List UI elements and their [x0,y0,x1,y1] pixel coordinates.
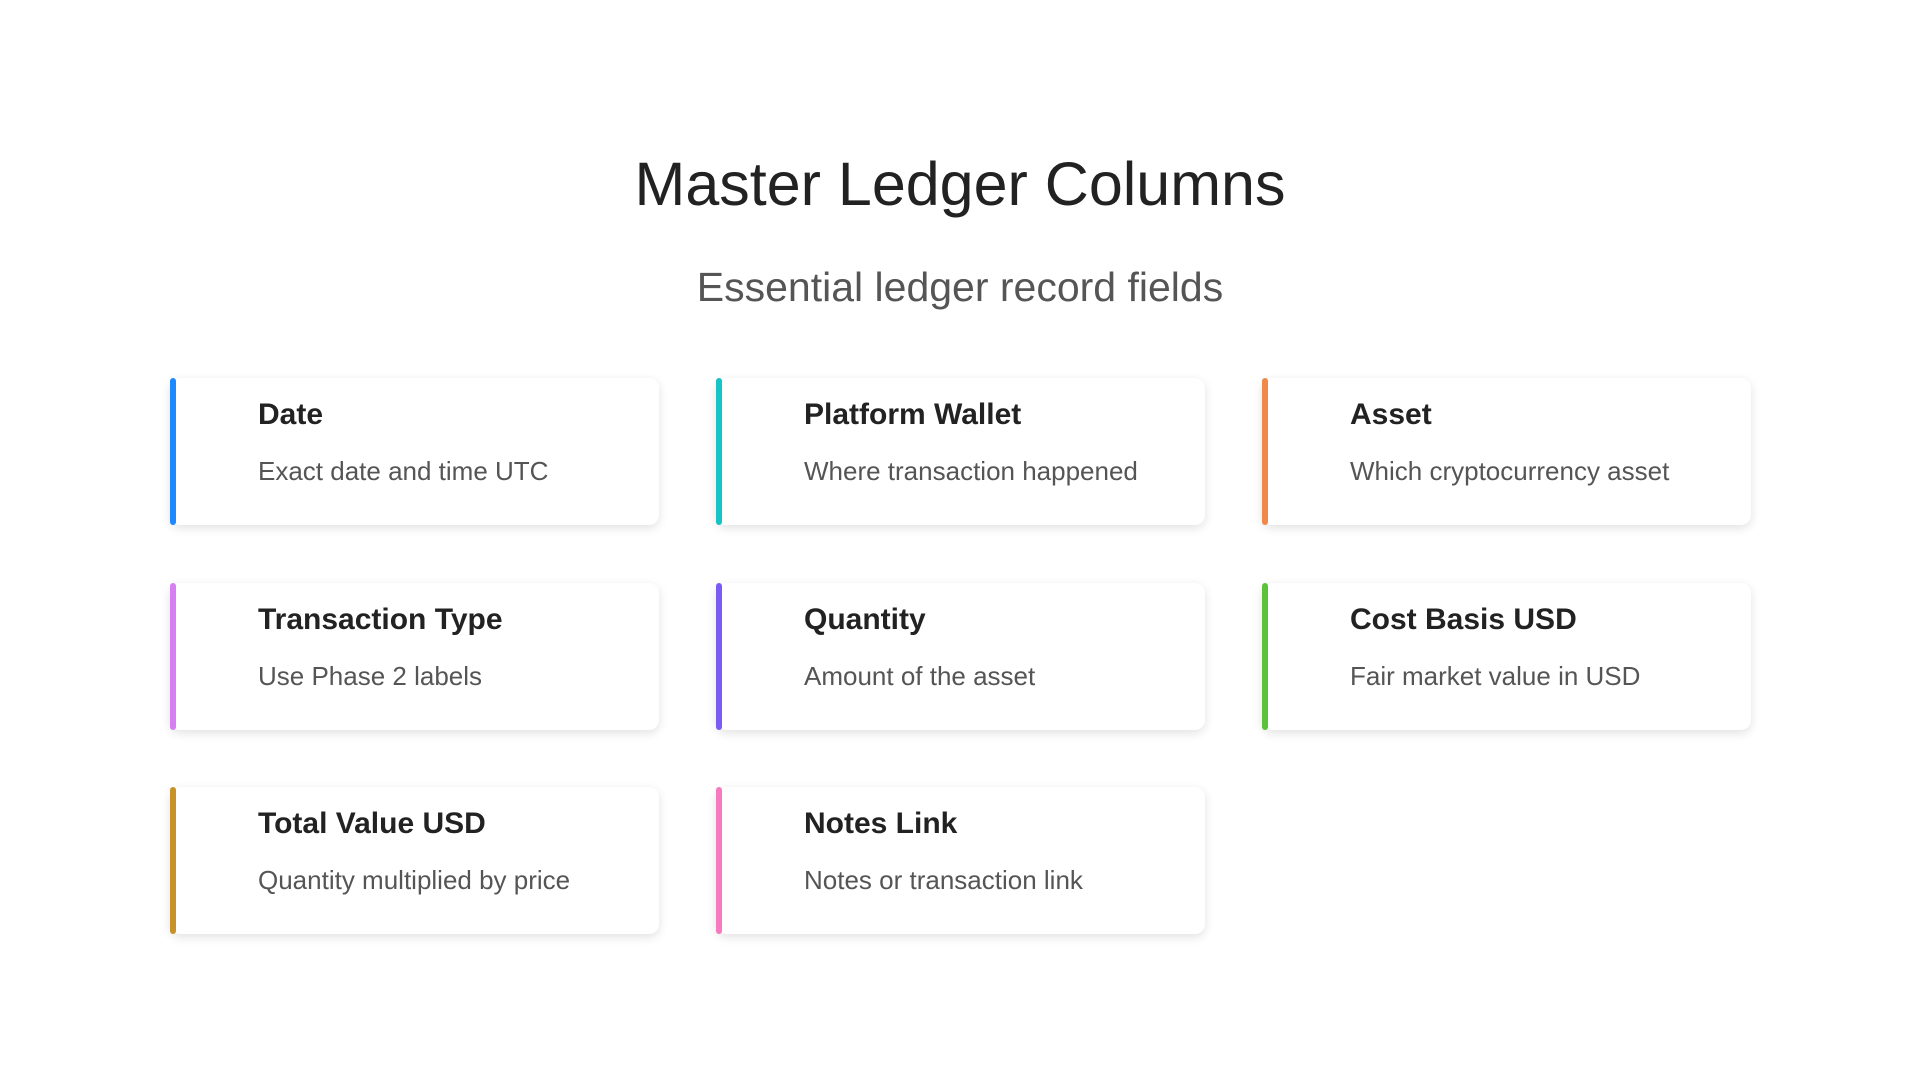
card: Total Value USD [170,787,659,934]
card description: Asset: Which cryptocurrency asset [1350,456,1669,486]
card title: Transaction Type: Transaction Type [258,603,503,636]
card: Date [170,378,659,525]
card description: Date: Exact date and time UTC [258,456,548,486]
card description: Total Value USD: Quantity multiplied by price [258,865,570,895]
card title: Cost Basis USD: Cost Basis USD [1350,603,1577,636]
card description: Transaction Type: Use Phase 2 labels [258,661,482,691]
card title: Asset: Asset [1350,398,1432,431]
subtitle: Essential ledger record fields [697,264,1223,310]
title: Master Ledger Columns [635,150,1285,218]
card description: Platform Wallet: Where transaction happened [804,456,1138,486]
card title: Date: Date [258,398,323,431]
card: Transaction Type [170,583,659,730]
card title: Quantity: Quantity [804,603,926,636]
card title: Platform Wallet: Platform Wallet [804,398,1021,431]
card title: Notes Link: Notes Link [804,807,957,840]
card: Quantity [716,583,1205,730]
card title: Total Value USD: Total Value USD [258,807,486,840]
card: Asset [1262,378,1751,525]
card description: Notes Link: Notes or transaction link [804,865,1083,895]
card: Cost Basis USD [1262,583,1751,730]
card: Platform Wallet [716,378,1205,525]
card description: Cost Basis USD: Fair market value in USD [1350,661,1640,691]
card: Notes Link [716,787,1205,934]
card description: Quantity: Amount of the asset [804,661,1035,691]
